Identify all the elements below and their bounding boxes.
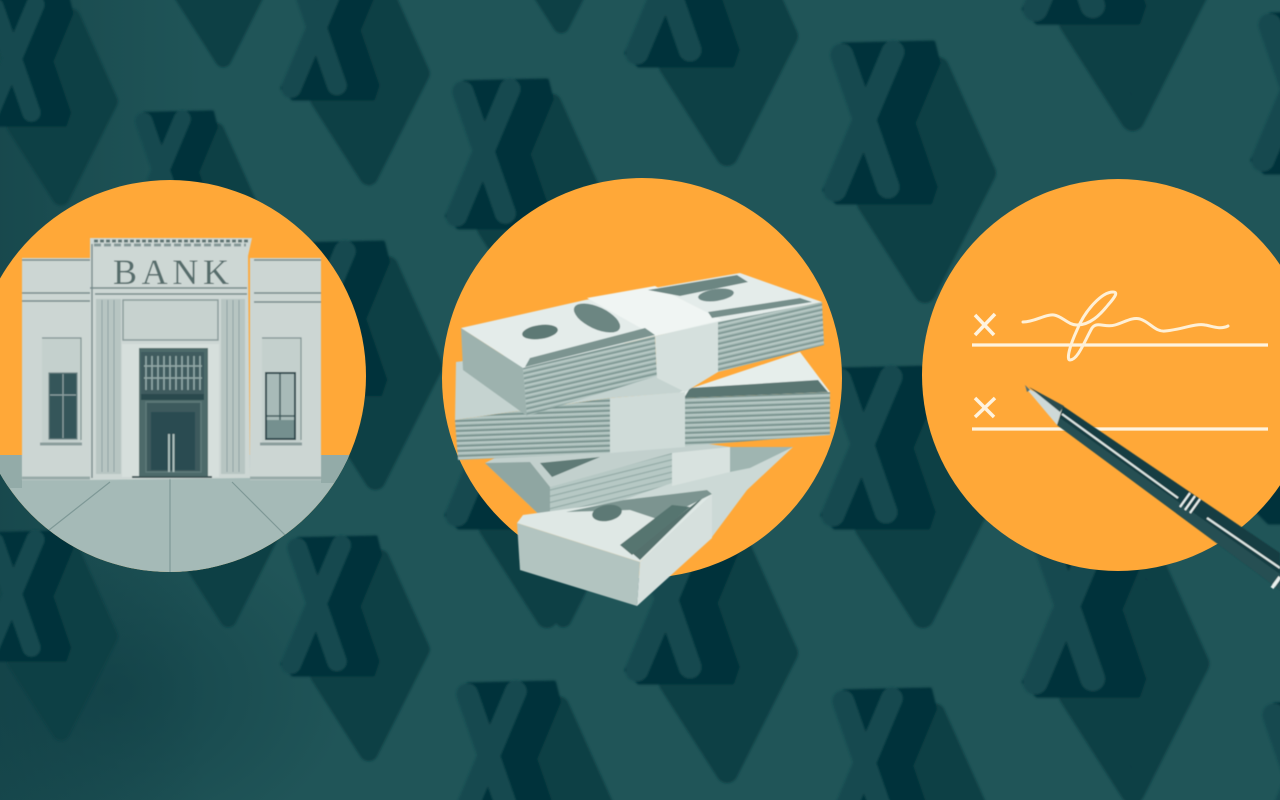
icon: x mark 2	[975, 398, 995, 417]
bottom bundle	[517, 490, 712, 606]
panel: money circle	[442, 178, 842, 606]
doors	[146, 402, 201, 472]
signature line 1	[972, 343, 1268, 347]
pilasters	[96, 299, 121, 474]
icon: x mark 1	[975, 314, 995, 335]
left window	[42, 338, 81, 444]
transom grille	[141, 352, 204, 394]
handwritten signature	[1023, 292, 1228, 360]
panel: signature circle	[922, 179, 1280, 590]
icon: pen	[1025, 385, 1280, 590]
third bundle	[485, 440, 793, 525]
icon: stack of cash	[455, 273, 830, 606]
right window	[262, 338, 301, 444]
icon: bank building	[22, 238, 321, 480]
panel: bank circle	[0, 180, 370, 580]
pavement	[0, 455, 350, 572]
signature line 2	[972, 427, 1268, 431]
top bundle	[461, 273, 824, 416]
light back of bottom bundles	[600, 447, 793, 537]
bank sign text: BANK	[113, 252, 229, 292]
door surround	[122, 344, 219, 477]
second bundle	[455, 340, 830, 460]
upper door panel	[123, 300, 218, 340]
